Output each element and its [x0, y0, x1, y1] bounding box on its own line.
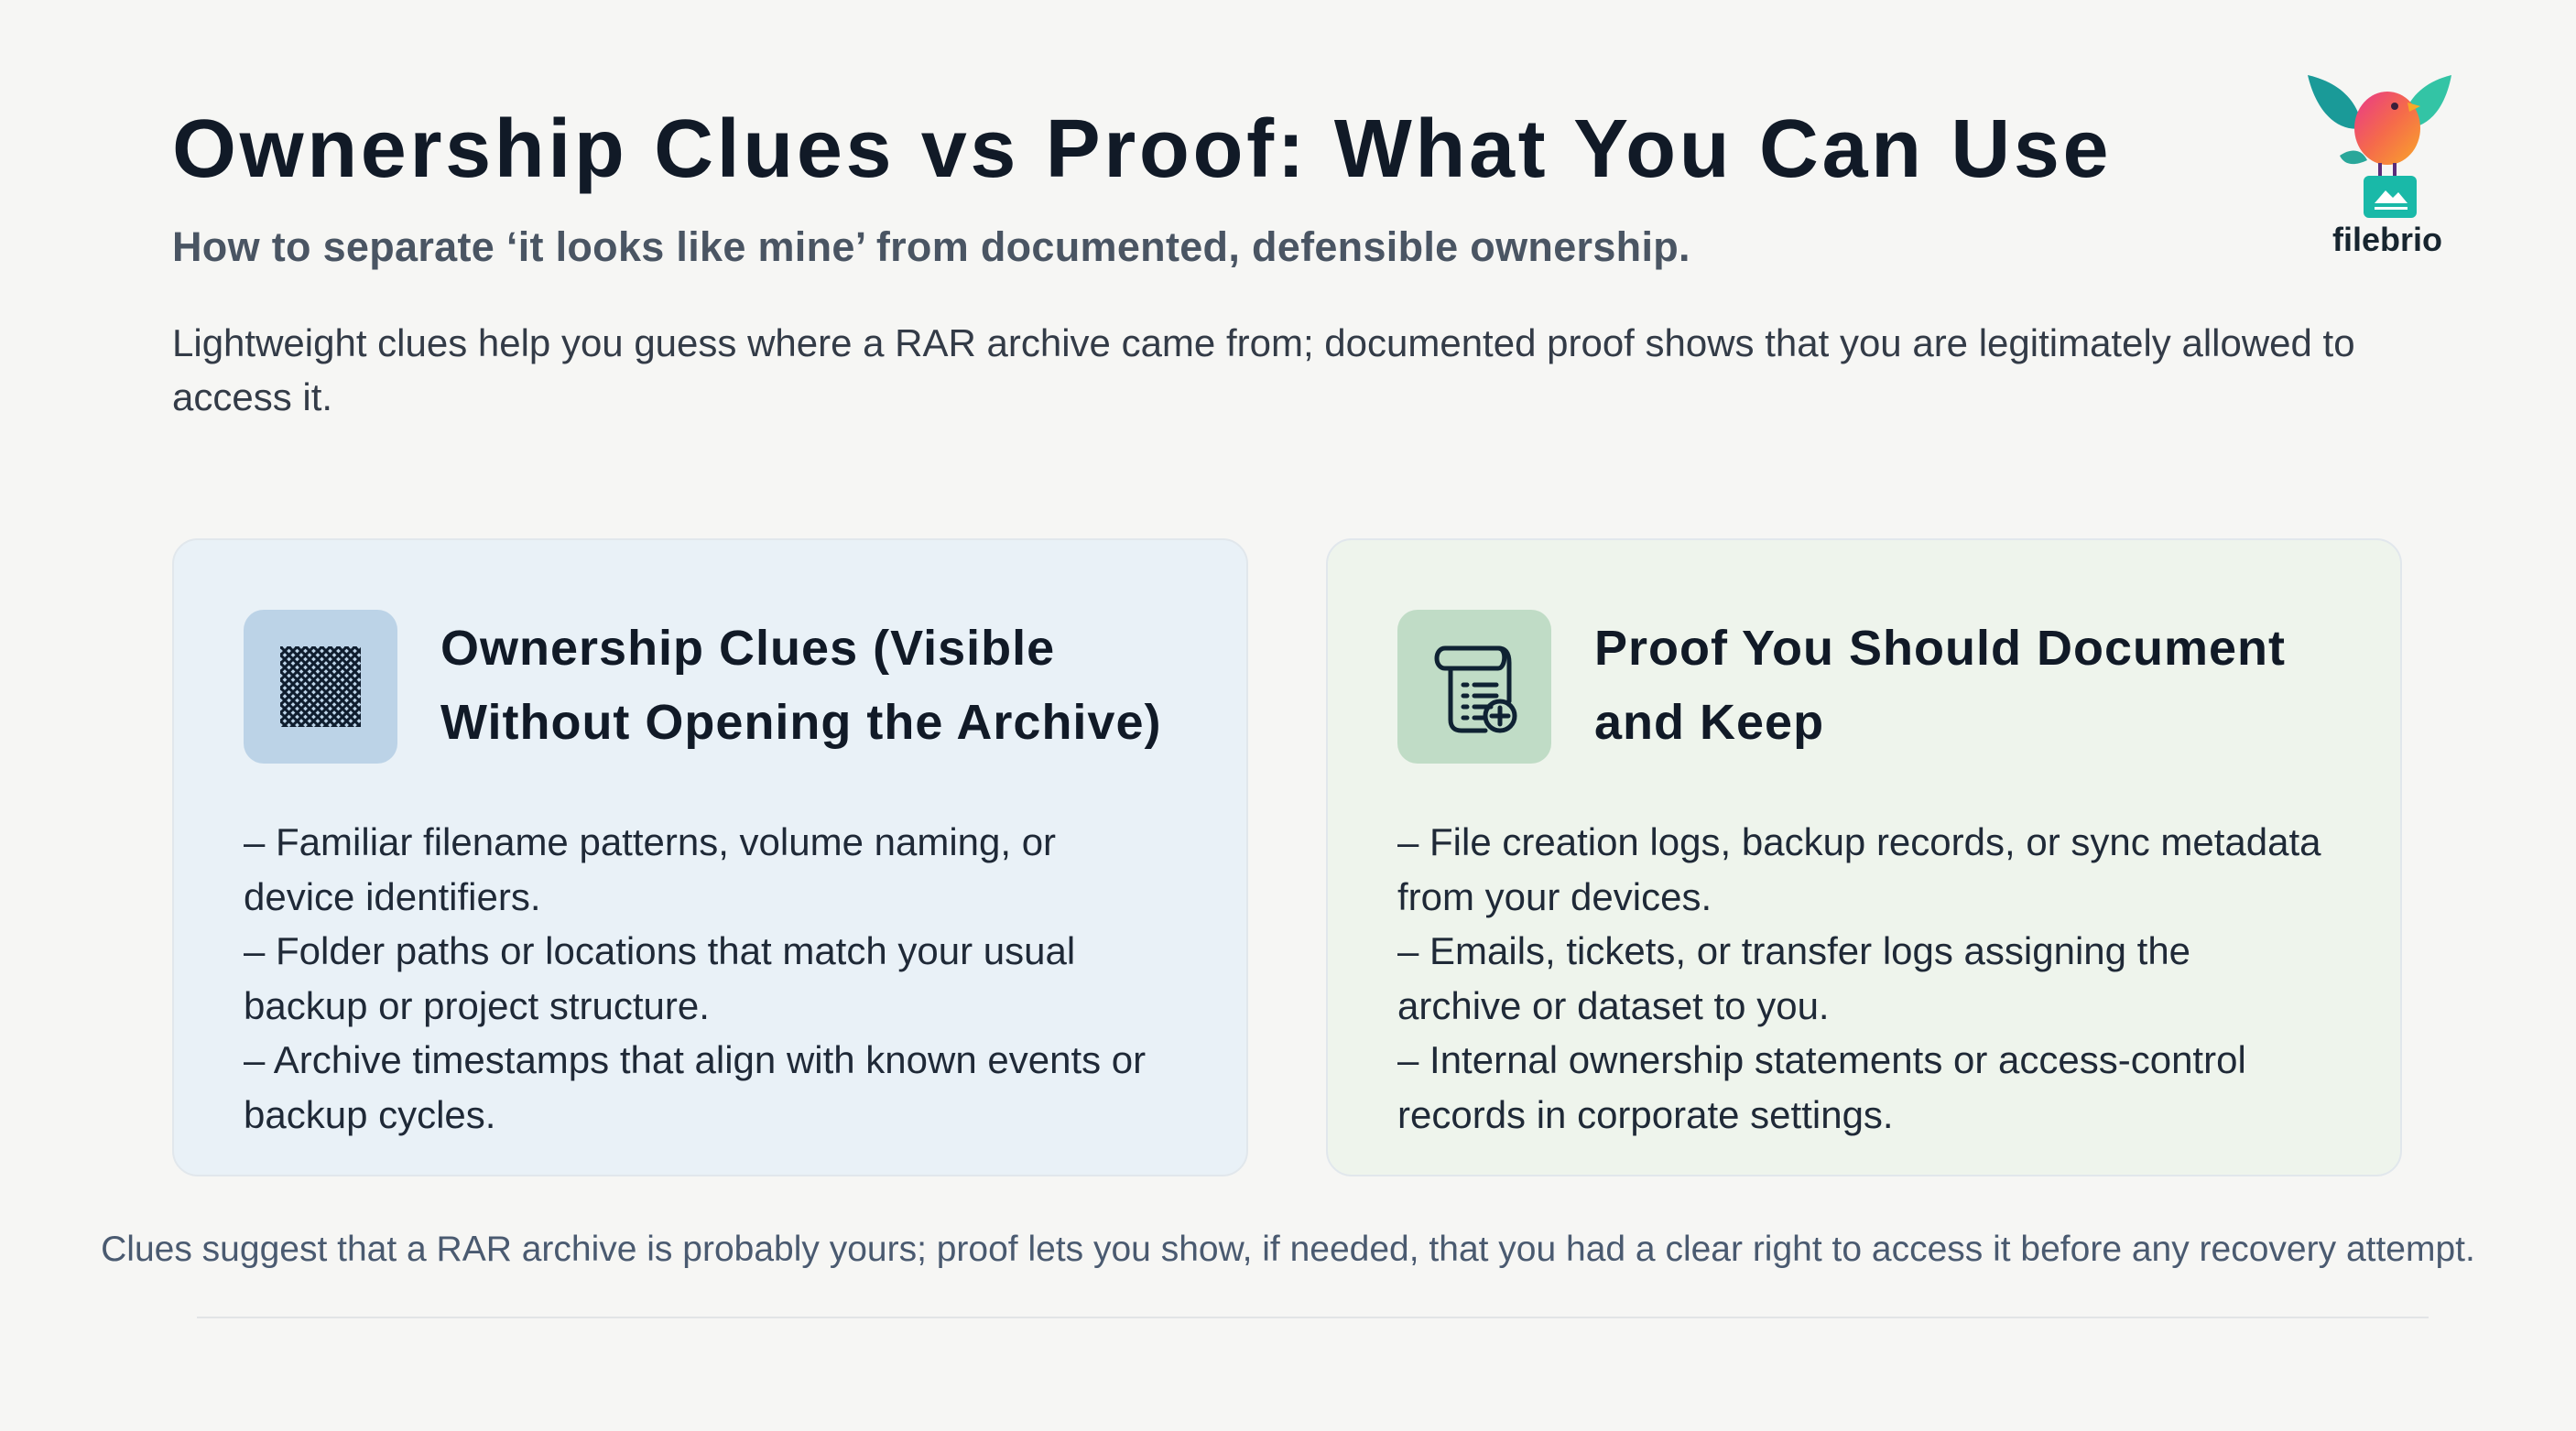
intro paragraph: access it.	[172, 375, 332, 418]
bullet list: clues: – Folder paths or locations that match your usual	[244, 929, 1075, 972]
icon: document scroll	[1397, 610, 1551, 764]
bullet list: clues: – Archive timestamps that align with known events or	[244, 1038, 1146, 1081]
bullet list: clues	[244, 820, 1146, 1135]
heading: proof: and Keep	[1594, 695, 1824, 750]
subtitle: How to separate ‘it looks like mine’ from documented, defensible ownership.	[172, 223, 1690, 270]
icon: pattern	[244, 610, 397, 764]
bullet list: clues: – Familiar filename patterns, volume naming, or	[244, 820, 1056, 863]
bullet list: proof: – Emails, tickets, or transfer logs assigning the	[1397, 929, 2190, 972]
heading: proof: Proof You Should Document	[1594, 621, 2286, 676]
bullet list: proof: – File creation logs, backup records, or sync metadata	[1397, 820, 2321, 863]
bullet list: clues: device identifiers.	[244, 875, 540, 917]
logo: filebrio	[2308, 75, 2451, 252]
bullet list: proof: records in corporate settings.	[1397, 1093, 1894, 1135]
heading: clues: Without Opening the Archive)	[440, 695, 1161, 750]
intro paragraph: Lightweight clues help you guess where a RAR archive came from; documented proof shows that you are legitimately allowed to	[172, 321, 2355, 364]
panel: proof	[1326, 538, 2402, 1176]
intro paragraph	[172, 321, 2355, 418]
bullet list: clues: backup or project structure.	[244, 983, 710, 1027]
bullet list: proof	[1397, 820, 2321, 1135]
bullet list: proof: – Internal ownership statements or access-control	[1397, 1038, 2246, 1081]
panel: ownership clues	[172, 538, 1248, 1176]
footer note: Clues suggest that a RAR archive is probably yours; proof lets you show, if needed, that you had a clear right to access it before any recovery attempt.	[101, 1230, 2475, 1269]
bullet list: proof: archive or dataset to you.	[1397, 983, 1830, 1027]
title: Ownership Clues vs Proof: What You Can Use	[172, 103, 2112, 195]
heading: clues	[440, 621, 1161, 750]
heading: proof	[1594, 621, 2286, 750]
heading: clues: Ownership Clues (Visible	[440, 621, 1055, 676]
bullet list: clues: backup cycles.	[244, 1093, 495, 1135]
bullet list: proof: from your devices.	[1397, 875, 1712, 917]
